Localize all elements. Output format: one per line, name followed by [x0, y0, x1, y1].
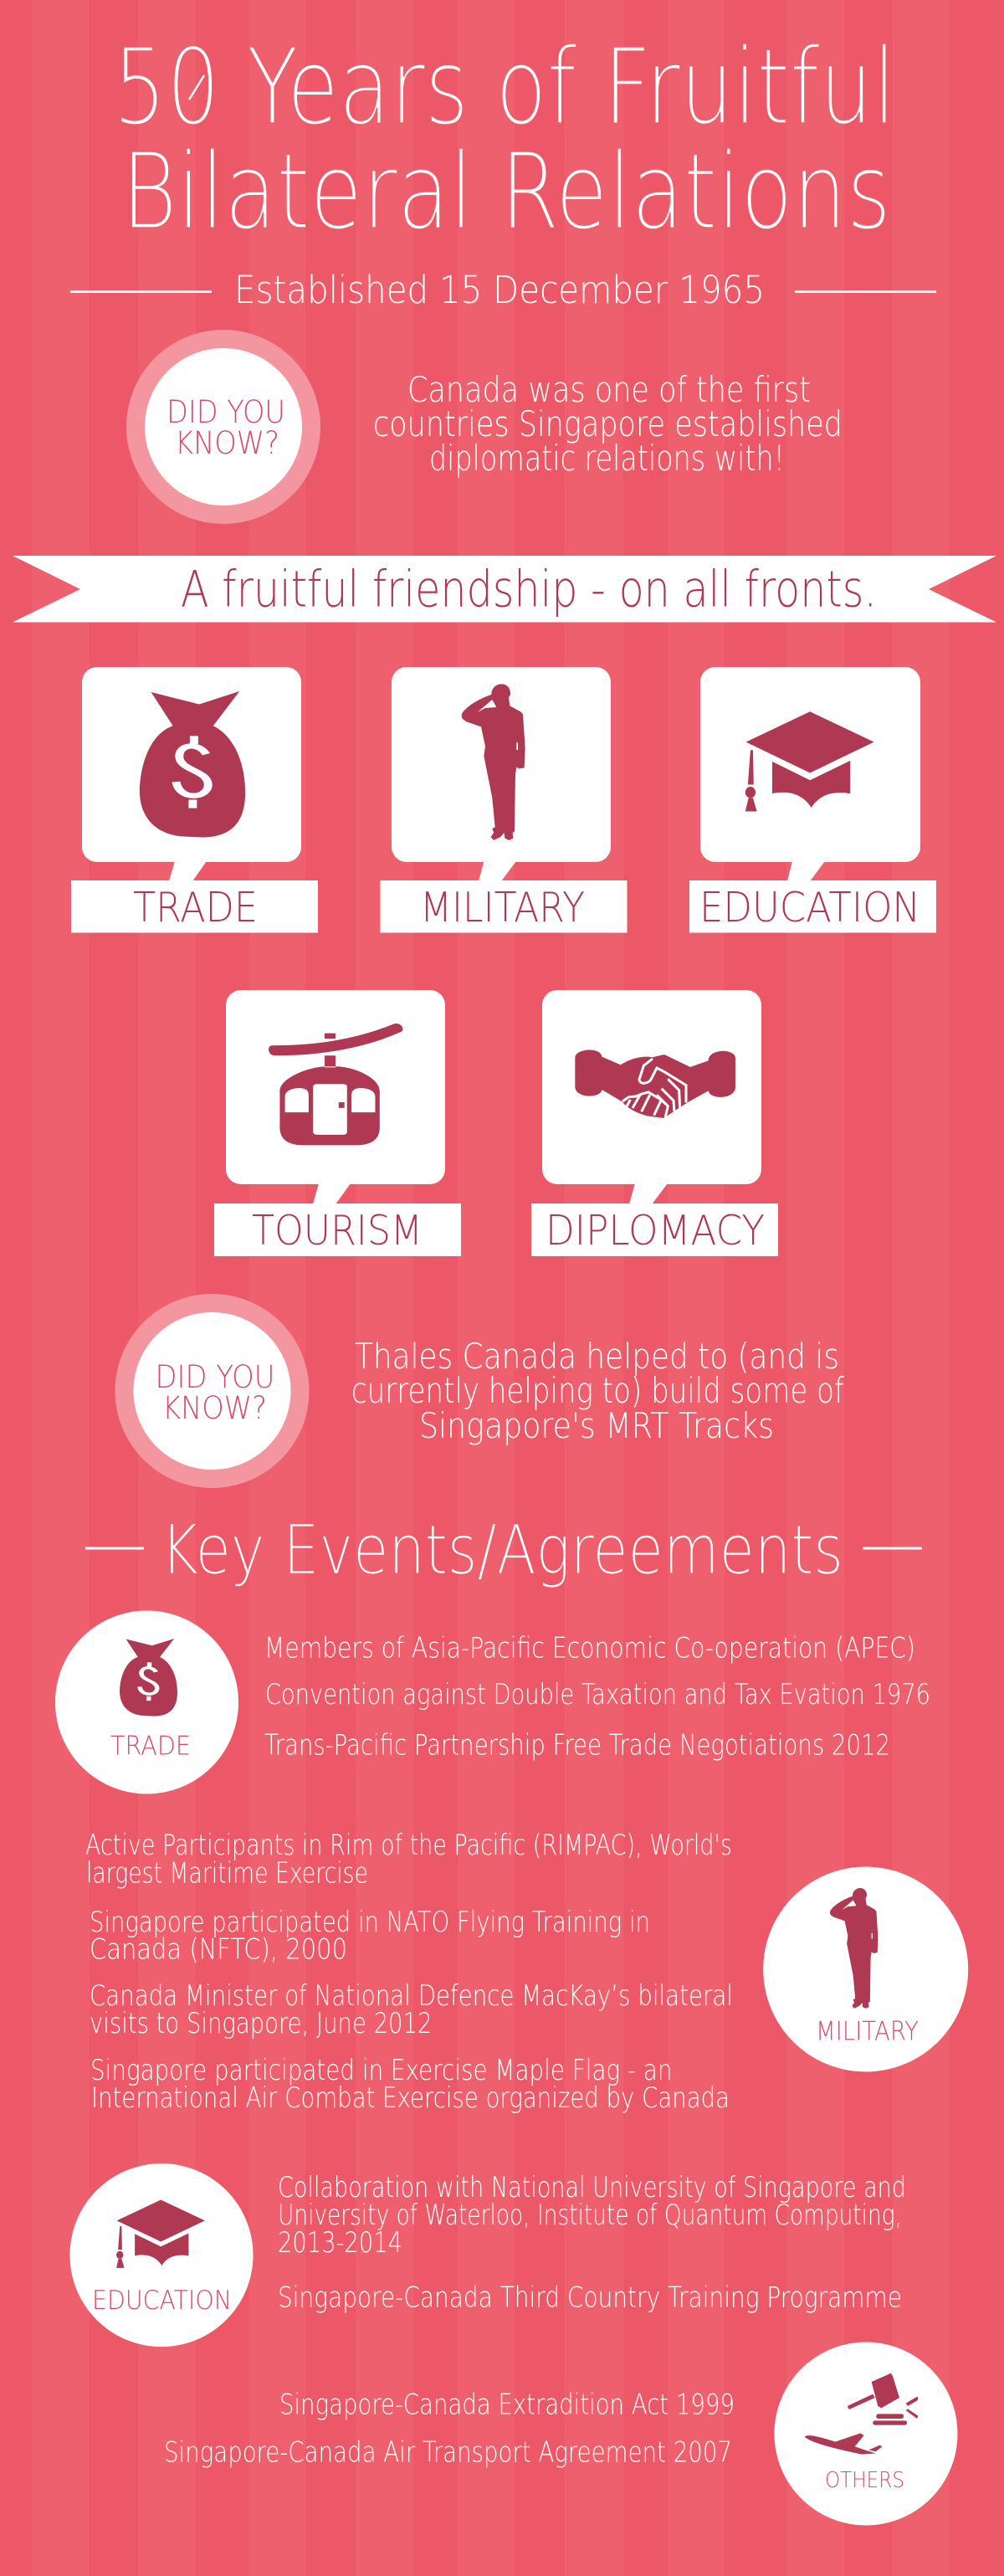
- military events list: International Air Combat Exercise organized by Canada: [91, 2081, 730, 2115]
- military events list: largest Maritime Exercise: [86, 1857, 368, 1891]
- did you know badge 2: DID YOU: [156, 1359, 274, 1395]
- education badge: EDUCATION: [92, 2286, 232, 2316]
- title: [113, 27, 896, 253]
- did you know badge 2: [115, 1294, 310, 1488]
- other agreements list: [164, 2389, 735, 2470]
- icon: gavel and airplane: [805, 2373, 918, 2455]
- established date with rules: [70, 268, 936, 312]
- education badge: [70, 2163, 253, 2347]
- icon: money bag: [140, 691, 245, 838]
- icon: soldier small: [830, 1888, 878, 2009]
- did you know badge 1: KNOW?: [175, 425, 279, 461]
- icon: saluting soldier: [462, 684, 525, 840]
- trade badge: TRADE: [110, 1731, 191, 1761]
- fact text 2: currently helping to) build some of: [351, 1370, 844, 1411]
- fact text 1: diplomatic relations with!: [429, 438, 785, 479]
- ribbon banner: A fruitful friendship - on all fronts.: [181, 561, 877, 619]
- military events list: visits to Singapore, June 2012: [90, 2007, 432, 2040]
- card: military: [380, 667, 628, 932]
- established date with rules: Established 15 December 1965: [234, 268, 765, 312]
- education events list: [278, 2171, 906, 2315]
- military badge: [763, 1866, 968, 2072]
- icon: handshake: [575, 1050, 735, 1118]
- fact text 1: Canada was one of the first: [407, 369, 811, 410]
- card: diplomacy: DIPLOMACY: [546, 1207, 765, 1255]
- card: tourism: [214, 990, 461, 1256]
- education events list: 2013-2014: [278, 2226, 402, 2260]
- fact text 2: [351, 1336, 844, 1446]
- other agreements list: Singapore-Canada Extradition Act 1999: [279, 2389, 735, 2422]
- card: education: [689, 667, 936, 932]
- fact text 1: countries Singapore established: [373, 403, 843, 444]
- card: education: EDUCATION: [699, 884, 920, 931]
- military events list: Singapore participated in NATO Flying Training in: [90, 1906, 650, 1939]
- fact text 2: Singapore's MRT Tracks: [419, 1405, 774, 1446]
- military events list: [85, 1829, 733, 2115]
- card: trade: TRADE: [133, 884, 258, 931]
- did you know badge 1: DID YOU: [166, 394, 285, 430]
- military events list: Active Participants in Rim of the Pacific (RIMPAC), World's: [85, 1829, 732, 1862]
- fact text 1: [373, 369, 843, 479]
- icon: cable car: [269, 1024, 402, 1145]
- other agreements list: Singapore-Canada Air Transport Agreement 2007: [164, 2436, 732, 2470]
- military events list: Singapore participated in Exercise Maple Flag - an: [90, 2054, 673, 2087]
- did you know badge 2: KNOW?: [162, 1390, 267, 1426]
- military events list: Canada (NFTC), 2000: [90, 1933, 347, 1967]
- icon: money bag small: [120, 1639, 177, 1716]
- trade agreements list: [264, 1632, 930, 1763]
- card: military: MILITARY: [420, 884, 585, 931]
- icon: graduation cap small: [116, 2199, 205, 2268]
- did you know badge 1: [126, 330, 320, 524]
- others badge: OTHERS: [825, 2468, 904, 2493]
- fact text 2: Thales Canada helped to (and is: [355, 1336, 839, 1377]
- others badge: [775, 2342, 957, 2526]
- card: tourism: TOURISM: [252, 1207, 423, 1255]
- icon: graduation cap: [745, 711, 874, 812]
- military events list: Canada Minister of National Defence MacKay’s bilateral: [90, 1979, 733, 2013]
- card: trade: [71, 667, 318, 932]
- section heading: key events: Key Events/Agreements: [161, 1511, 843, 1590]
- trade badge: [55, 1610, 238, 1794]
- card: diplomacy: [531, 990, 778, 1256]
- military badge: MILITARY: [816, 2016, 919, 2046]
